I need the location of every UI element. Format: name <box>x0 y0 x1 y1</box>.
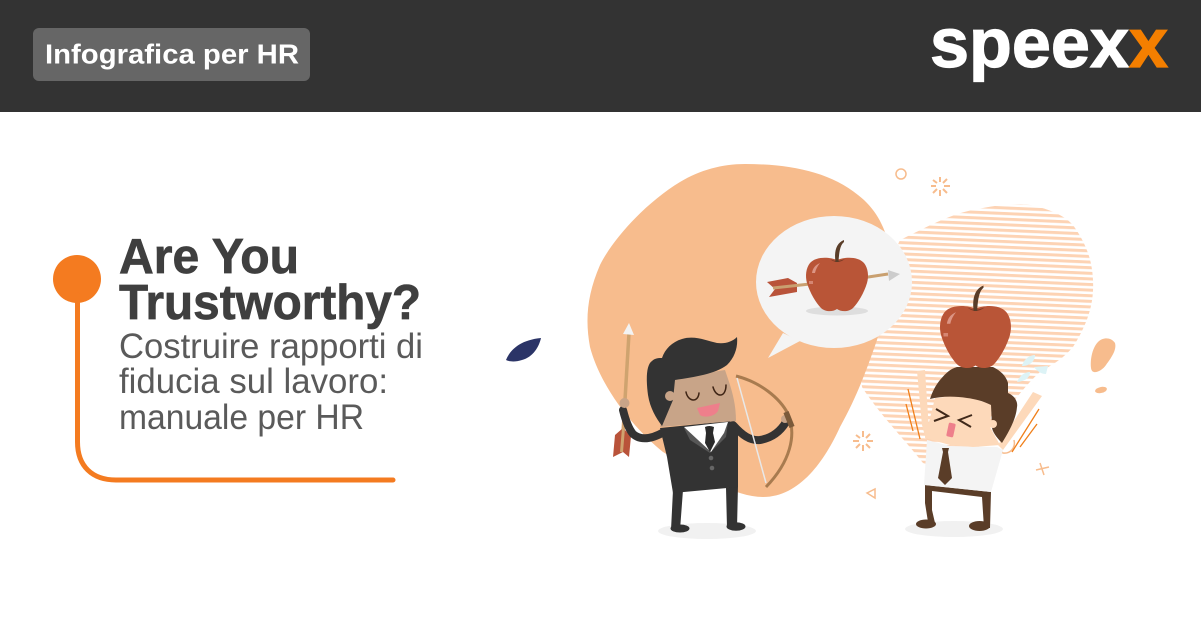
shadow <box>905 521 1003 537</box>
decorative burst bottom <box>853 431 873 451</box>
raised arms <box>917 370 1042 450</box>
hair <box>647 337 737 426</box>
logo: speexx: speexx <box>930 4 1168 82</box>
motion lines <box>906 389 1039 452</box>
orange blob <box>587 164 890 497</box>
tie <box>705 426 715 452</box>
badge <box>33 28 310 81</box>
tie <box>938 448 952 485</box>
speech bubble with apple and arrow <box>756 216 912 358</box>
title: Trustworthy? <box>119 276 421 330</box>
decorative circle <box>896 169 906 179</box>
hands <box>620 398 789 423</box>
arms <box>623 410 786 440</box>
face <box>660 370 736 427</box>
subtitle <box>119 327 423 437</box>
header bar <box>0 0 1201 112</box>
subtitle: fiducia sul lavoro: <box>119 362 388 401</box>
ear <box>665 391 675 401</box>
exclamation mark <box>1091 338 1115 394</box>
title <box>119 230 421 330</box>
timeline accent: circle and line <box>53 255 393 480</box>
buttons <box>709 456 714 470</box>
apple in bubble <box>806 240 868 311</box>
arrow held <box>613 323 634 457</box>
leaf <box>506 338 541 362</box>
title: Are You <box>119 230 299 284</box>
eyes <box>686 385 726 400</box>
legs and shoes <box>916 485 991 531</box>
ear <box>989 420 997 428</box>
arrow shaft <box>773 274 888 288</box>
bow <box>736 376 792 487</box>
mouth <box>946 422 956 438</box>
shirt <box>684 422 728 452</box>
arrow fletching <box>767 278 797 297</box>
illustration <box>506 164 1115 539</box>
archer man <box>613 323 792 539</box>
face <box>925 396 1000 447</box>
mouth <box>697 403 720 417</box>
decorative cross <box>1036 463 1049 475</box>
surprised man <box>905 285 1048 537</box>
shadow <box>658 523 756 539</box>
badge: Infografica per HR <box>45 38 299 70</box>
arrow tip <box>888 270 900 281</box>
lapels <box>684 422 728 453</box>
hair <box>930 367 1017 443</box>
decorative triangle <box>867 489 875 498</box>
hand ring <box>1000 440 1014 453</box>
sweat drops <box>1017 355 1048 382</box>
shirt <box>924 440 1003 492</box>
subtitle: manuale per HR <box>119 398 364 437</box>
legs and shoes <box>670 486 746 532</box>
eyes <box>934 409 972 427</box>
apple on head <box>940 285 1011 368</box>
subtitle: Costruire rapporti di <box>119 327 423 366</box>
apple shadow <box>806 306 868 316</box>
decorative burst top <box>931 177 950 196</box>
suit <box>660 421 738 493</box>
striped blob <box>862 204 1093 466</box>
